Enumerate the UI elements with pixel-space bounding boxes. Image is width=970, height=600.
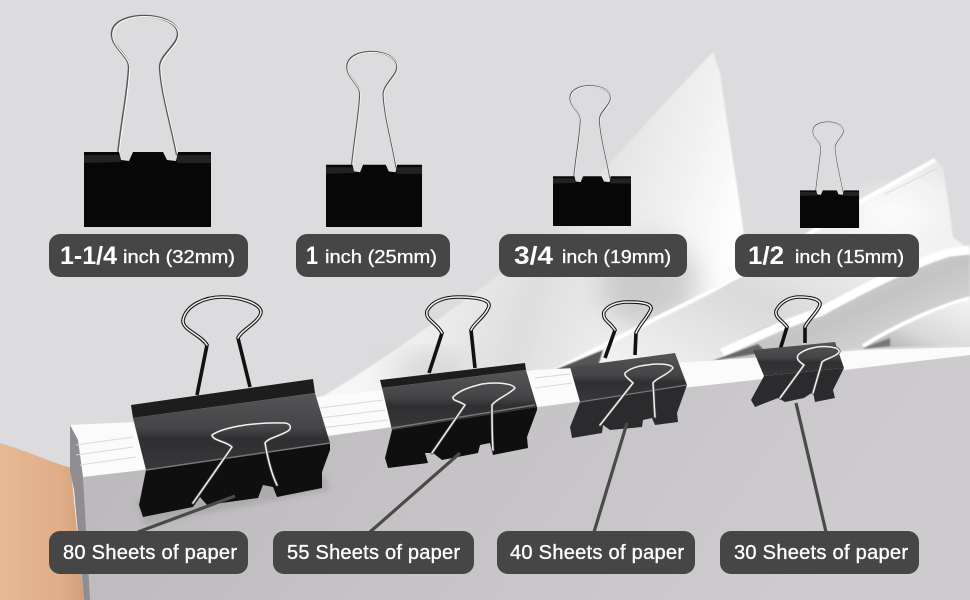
fanned paper sheets <box>320 52 970 398</box>
clip A: holding 80 sheets <box>131 297 330 517</box>
size label: 3/4 inch <box>499 234 687 277</box>
clip D: holding 30 sheets <box>751 297 844 407</box>
capacity label: 80 sheets <box>49 531 248 574</box>
capacity label: 30 sheets: 30 Sheets of paper <box>734 542 908 564</box>
size label: 1-1/4 inch: 1-1/4 <box>60 242 117 270</box>
size label: 1/2 inch: 1/2 <box>748 242 784 270</box>
paper stack <box>70 347 970 600</box>
clip C: holding 40 sheets <box>570 302 687 438</box>
icon: 1/2 inch clip <box>800 122 859 228</box>
size label: 1/2 inch <box>735 234 919 277</box>
capacity label: 30 sheets <box>720 531 919 574</box>
icon: 1-1/4 inch clip <box>84 16 211 227</box>
arm holding the paper <box>0 443 88 600</box>
capacity label: 55 sheets: 55 Sheets of paper <box>287 542 460 564</box>
capacity label: 40 sheets <box>497 531 695 574</box>
capacity label: 40 sheets: 40 Sheets of paper <box>510 542 684 564</box>
size label: 1/2 inch: inch (15mm) <box>795 247 904 267</box>
size label: 3/4 inch: inch (19mm) <box>562 247 671 267</box>
icon: 3/4 inch clip <box>553 86 631 226</box>
size label: 1 inch: inch (25mm) <box>325 247 437 267</box>
size label: 1-1/4 inch: inch (32mm) <box>123 247 235 267</box>
size label: 1-1/4 inch <box>49 234 248 277</box>
capacity label: 80 sheets: 80 Sheets of paper <box>63 542 237 564</box>
size label: 3/4 inch: 3/4 <box>514 242 553 270</box>
capacity label: 55 sheets <box>273 531 474 574</box>
size label: 1 inch: 1 <box>306 242 318 270</box>
clip B: holding 55 sheets <box>380 297 537 468</box>
leader lines <box>138 403 826 532</box>
size label: 1 inch <box>296 234 450 277</box>
icon: 1 inch clip <box>326 52 422 227</box>
